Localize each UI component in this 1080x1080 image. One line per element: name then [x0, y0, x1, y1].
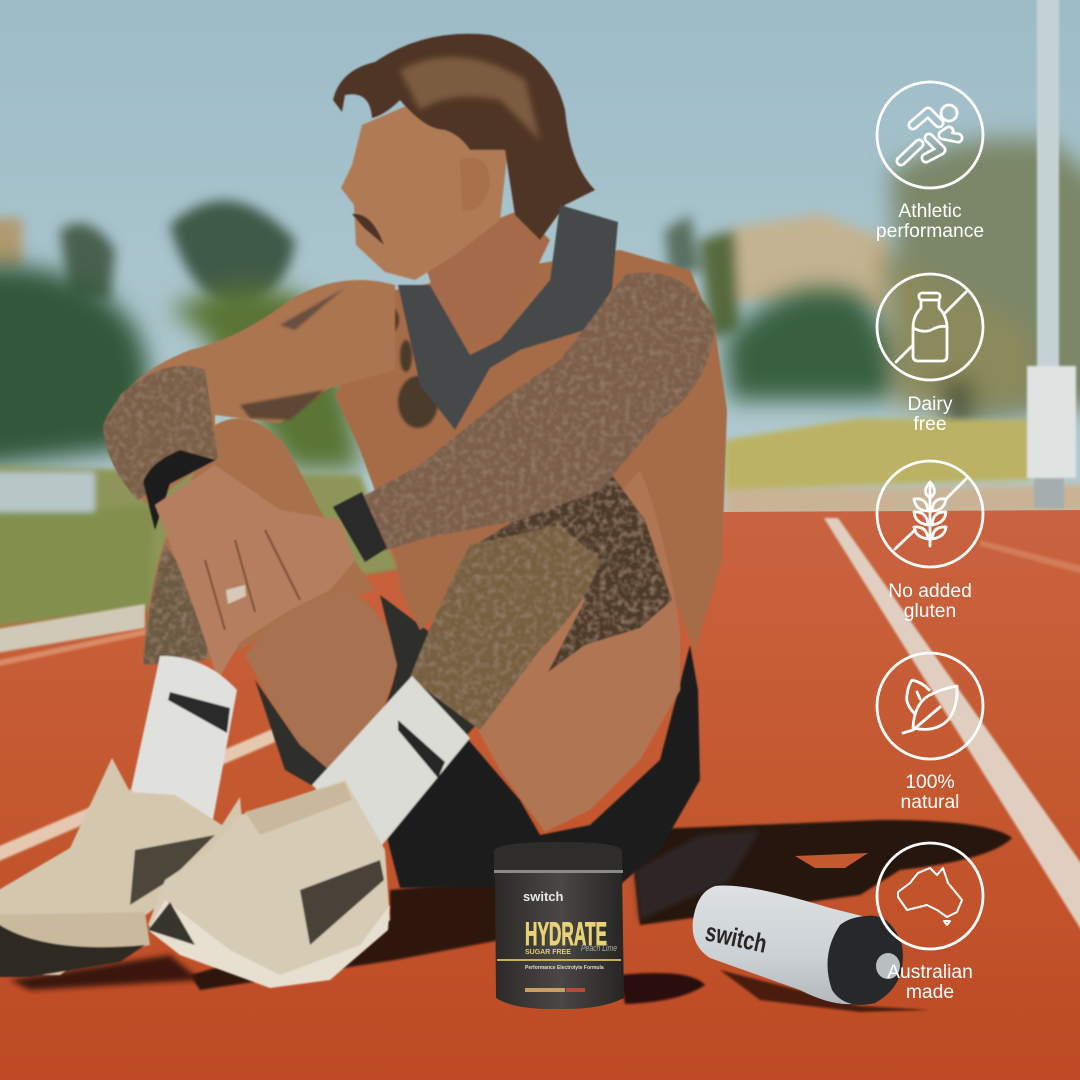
near sock: [312, 676, 470, 850]
background: sky: [0, 0, 1080, 520]
label: 100% natural: 100%: [905, 772, 955, 793]
badge: no added gluten: [877, 461, 983, 567]
overlay: benefit labels: [876, 201, 984, 1003]
product: Hydrate tub: switch: [523, 889, 564, 904]
label: australian made: Australian: [887, 962, 973, 983]
wristband: [333, 492, 387, 562]
far shoe: [0, 758, 243, 977]
label: 100% natural: natural: [901, 792, 959, 813]
background: blurred trees and buildings: [0, 138, 1080, 470]
far thigh and shin: [143, 418, 397, 775]
torso: [335, 250, 727, 650]
label: no added gluten: No added: [888, 581, 972, 602]
badge: 100% natural: [877, 653, 983, 759]
badge: australian made: [877, 843, 983, 949]
product: water bottle: [693, 885, 903, 1005]
label: australian made: made: [906, 982, 954, 1003]
label: dairy free: free: [913, 414, 947, 435]
towel: [398, 205, 618, 430]
near thigh tattoo: [470, 465, 672, 672]
product: Hydrate tub: Peach Lime: [581, 943, 617, 953]
watch: [143, 450, 216, 530]
badge: dairy free: [877, 274, 983, 380]
product: Hydrate tub: SUGAR FREE: [525, 949, 571, 956]
overlay: benefit badges: [877, 82, 983, 949]
shorts: [255, 595, 700, 888]
far arm: [103, 280, 395, 505]
product: Hydrate tub: HYDRATE: [525, 916, 607, 952]
product: Hydrate tub: Performance Electrolyte Formula: [525, 965, 604, 971]
chest tattoos: [377, 306, 438, 428]
ground shadow: [10, 820, 1012, 1012]
near arm: [362, 273, 715, 552]
product: water bottle: switch: [703, 917, 770, 959]
far sock: [131, 656, 237, 825]
clasped hands: [155, 465, 355, 680]
near thigh: [470, 470, 680, 832]
athlete: [0, 34, 727, 988]
badge: athletic performance: [877, 82, 983, 188]
near shin: [410, 525, 600, 730]
background: grass fields: [0, 418, 1080, 630]
track edge kerb: [0, 604, 145, 654]
label: no added gluten: gluten: [904, 601, 956, 622]
label: dairy free: Dairy: [908, 394, 952, 415]
product: Hydrate tub: [494, 842, 624, 1009]
background: white pole: [1027, 0, 1076, 508]
label: athletic performance: Athletic: [898, 201, 962, 222]
label: athletic performance: performance: [876, 221, 984, 242]
near shoe: [148, 780, 390, 988]
track lane lines: [0, 518, 1080, 960]
neck and head: [333, 34, 595, 345]
hair: [333, 34, 595, 240]
track surface: [0, 510, 1080, 1080]
